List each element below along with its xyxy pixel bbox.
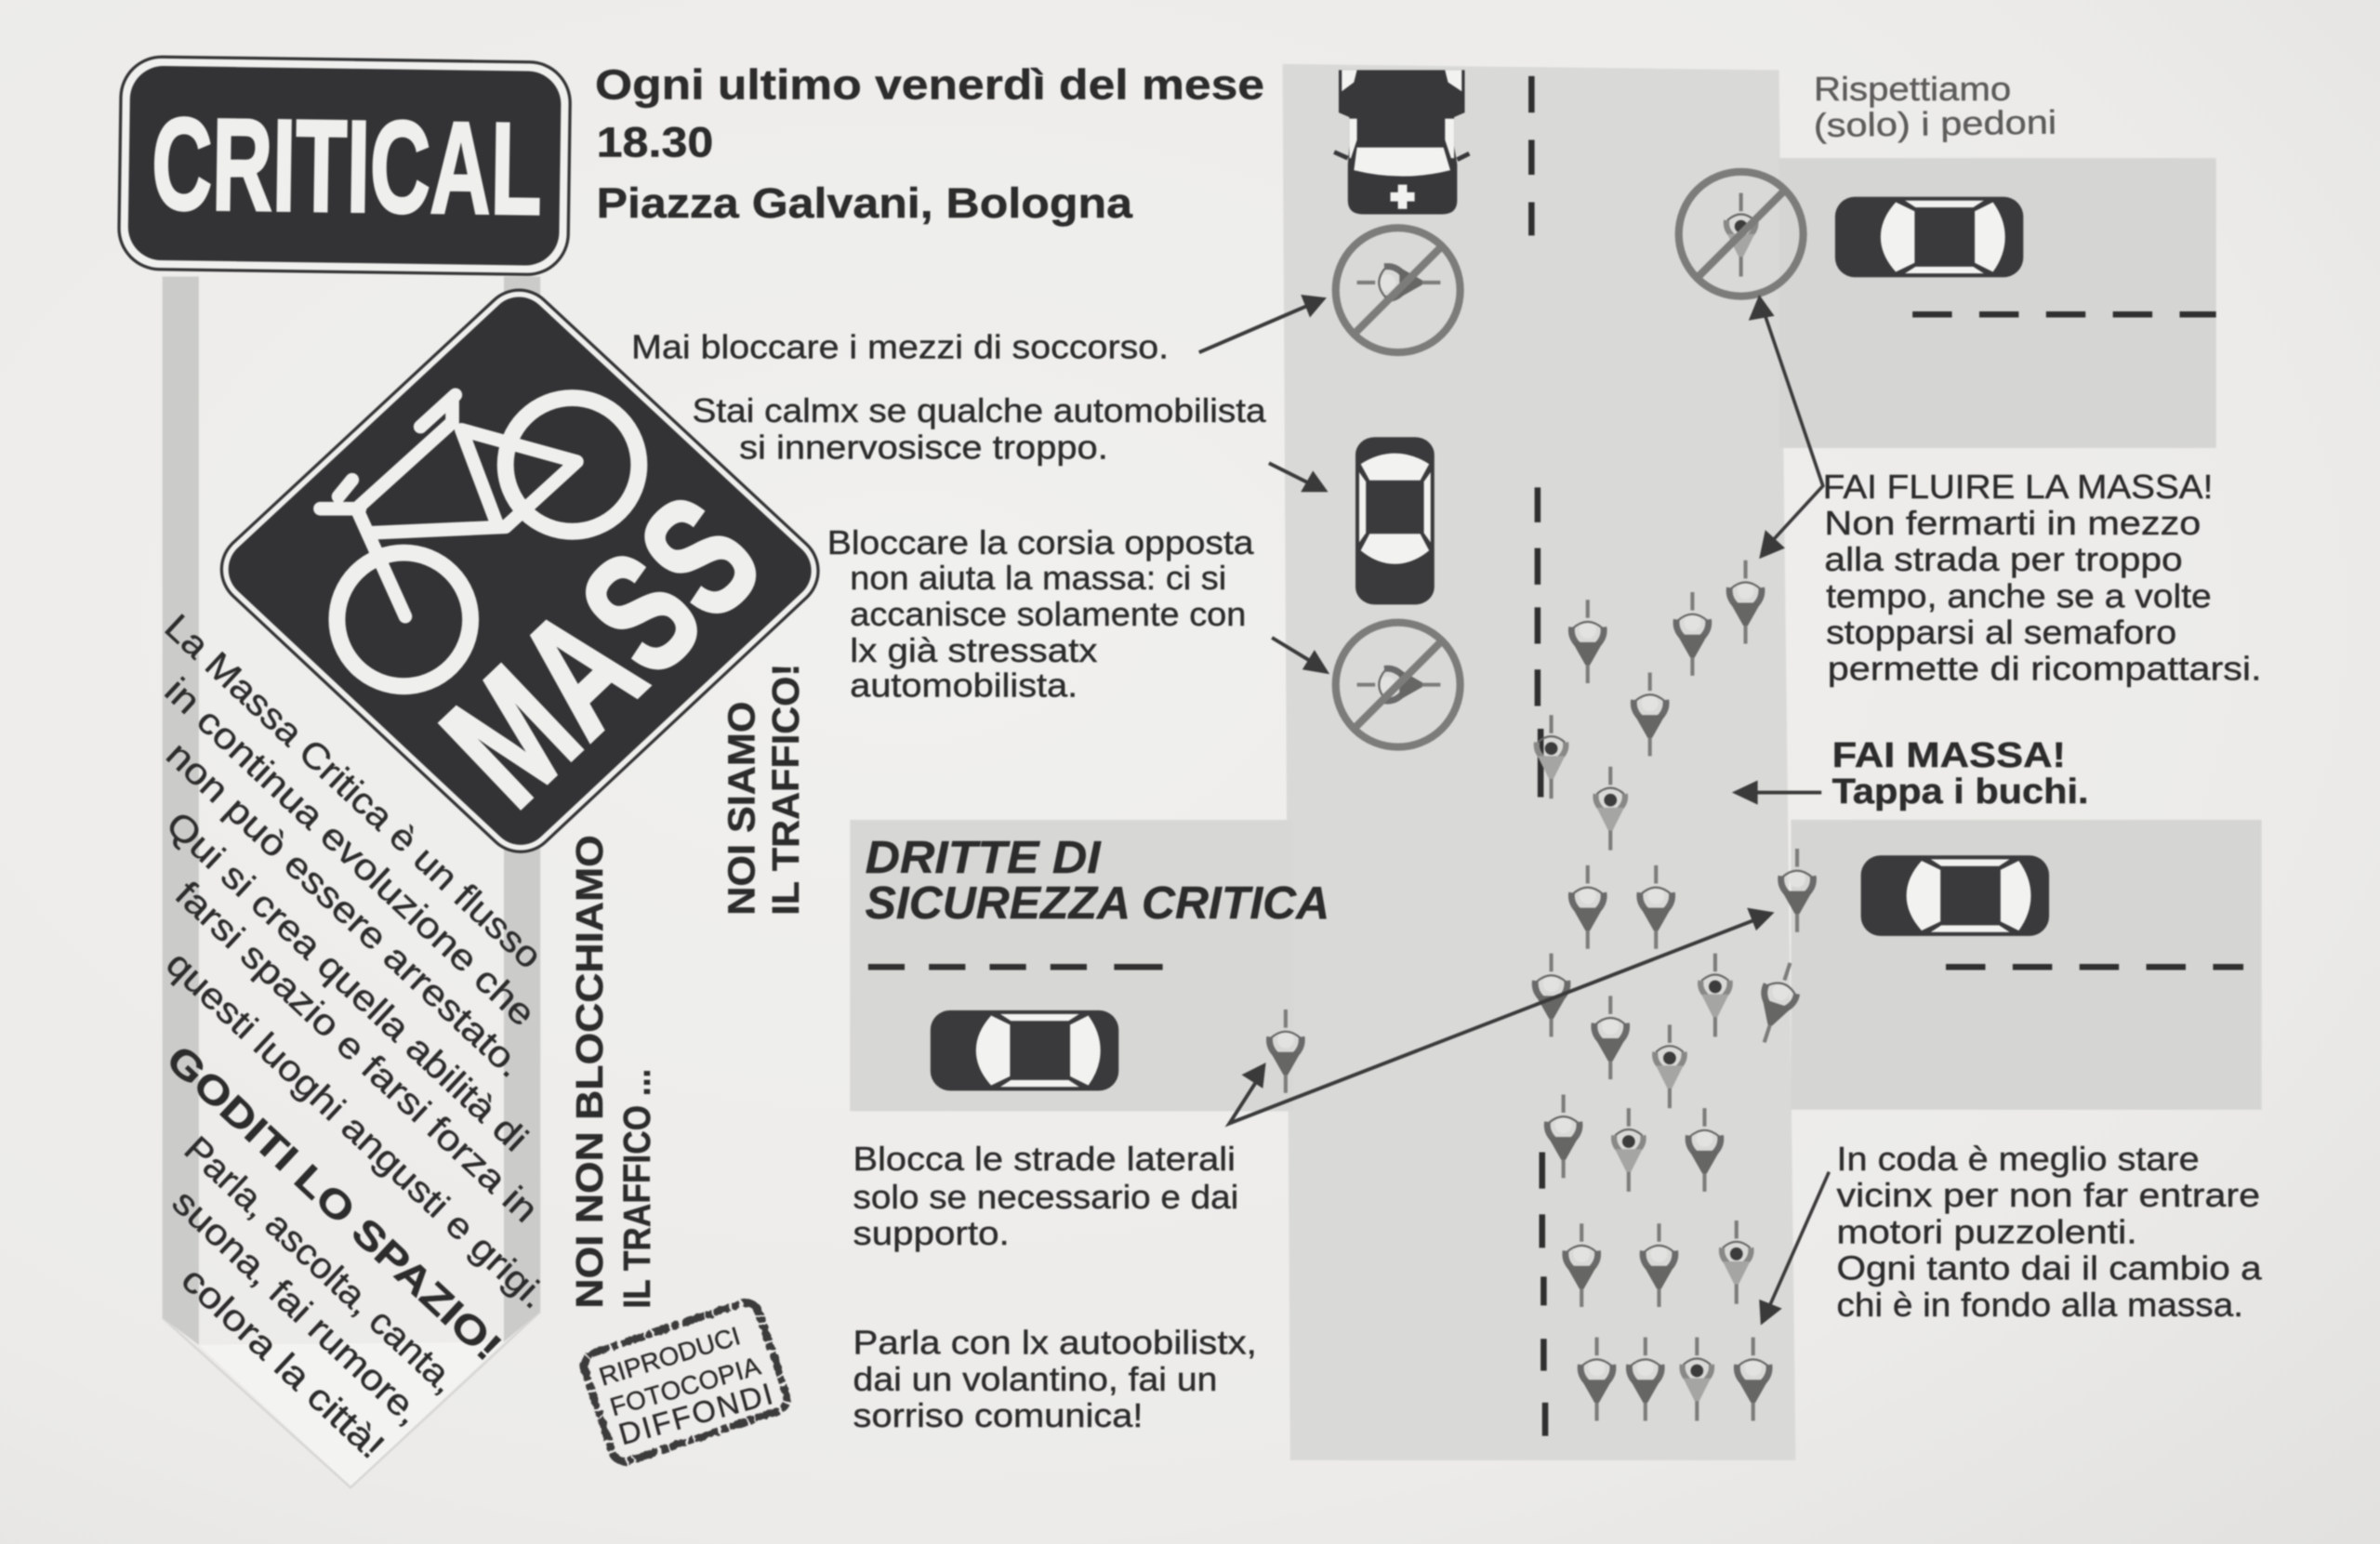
tip: in coda: chi è in fondo alla massa. <box>1837 1286 2243 1324</box>
text block: manifesto (diagonal): GODITI LO SPAZIO! <box>158 1036 510 1369</box>
heading: dritte di sicurezza critica: DRITTE DI <box>866 833 1102 883</box>
tip: strade laterali: supporto. <box>853 1214 1010 1252</box>
heading: dritte di sicurezza critica: SICUREZZA CRITICA <box>866 878 1329 929</box>
text block: manifesto (diagonal): Qui si crea quella abilità di <box>158 804 536 1159</box>
heading: dritte di sicurezza critica <box>866 833 1329 929</box>
vertical slogan: noi siamo il traffico: NOI SIAMO <box>720 702 762 916</box>
vertical slogan: noi siamo il traffico <box>720 664 807 916</box>
sign: MASS diamond with bicycle <box>258 326 795 840</box>
vertical slogan: noi non blocchiamo: IL TRAFFICO ... <box>615 1069 658 1309</box>
tip: parla con lx automobilistx <box>853 1324 1257 1434</box>
banner chevron behind signs <box>163 276 540 1487</box>
text block: manifesto (diagonal): colora la città! <box>174 1260 391 1467</box>
road network <box>850 64 2262 1460</box>
stamp: riproduci fotocopia diffondi: RIPRODUCI <box>596 1321 744 1392</box>
icon: no bike blocking ambulance <box>1336 228 1461 352</box>
tip: strade laterali: Blocca le strade laterali <box>853 1140 1236 1178</box>
tip: stai calmx: si innervosisce troppo. <box>739 428 1108 466</box>
tip: parla con lx automobilistx: dai un volantino, fai un <box>853 1360 1217 1398</box>
arrow: in coda <box>1759 1172 1829 1326</box>
tip: fai fluire la massa: alla strada per troppo <box>1824 540 2183 578</box>
heading: event details: 18.30 <box>597 118 713 165</box>
tip: corsia opposta <box>827 523 1254 705</box>
stamp: riproduci fotocopia diffondi: FOTOCOPIA <box>607 1351 764 1421</box>
tip: fai fluire la massa: Non fermarti in mezzo <box>1824 504 2201 542</box>
tip: in coda <box>1837 1140 2262 1324</box>
tip: rispettiamo i pedoni <box>1814 70 2056 144</box>
tip: in coda: In coda è meglio stare <box>1837 1140 2200 1178</box>
sign: MASS diamond with bicycle: MASS <box>408 459 795 840</box>
cyclists: the mass <box>1269 561 1813 1420</box>
icon: no bike blocking opposite lane <box>1336 623 1461 747</box>
tip: in coda: vicinx per non far entrare <box>1837 1176 2260 1214</box>
sign: CRITICAL: CRITICAL <box>151 90 543 242</box>
stamp: riproduci fotocopia diffondi: DIFFONDI <box>615 1376 776 1451</box>
tip: fai fluire la massa <box>1823 468 2262 688</box>
sign: CRITICAL <box>117 55 572 277</box>
arrow: to parked car <box>1269 463 1329 492</box>
tip: fai fluire la massa: tempo, anche se a volte <box>1826 576 2212 614</box>
text block: manifesto (diagonal) <box>157 607 554 1467</box>
icon: car top right <box>1835 197 2023 277</box>
heading: event details: Piazza Galvani, Bologna <box>597 179 1133 227</box>
tip: mezzi di soccorso: Mai bloccare i mezzi di soccorso. <box>631 328 1169 366</box>
tip: stai calmx <box>692 391 1266 466</box>
tip: rispettiamo i pedoni: Rispettiamo <box>1814 70 2011 108</box>
text block: manifesto (diagonal): farsi spazio e farsi forza in <box>167 874 546 1231</box>
vertical slogan: noi siamo il traffico: IL TRAFFICO! <box>764 664 807 916</box>
tip: rispettiamo i pedoni: (solo) i pedoni <box>1814 103 2056 144</box>
text block: manifesto (diagonal): in continua evoluzione che <box>157 671 543 1035</box>
tip: fai massa: Tappa i buchi. <box>1832 772 2089 811</box>
tip: strade laterali: solo se necessario e dai <box>853 1178 1238 1216</box>
arrow: strade laterali double arrow <box>1229 908 1775 1123</box>
tip: fai massa <box>1832 735 2089 811</box>
tip: fai massa: FAI MASSA! <box>1832 735 2066 774</box>
tip: corsia opposta: automobilista. <box>850 666 1078 705</box>
tip: corsia opposta: non aiuta la massa: ci si <box>850 559 1226 597</box>
tip: parla con lx automobilistx: Parla con lx autoobilistx, <box>853 1324 1257 1362</box>
tip: corsia opposta: lx già stressatx <box>850 631 1097 669</box>
tip: in coda: Ogni tanto dai il cambio a <box>1837 1249 2262 1287</box>
tip: fai fluire la massa: stopparsi al semaforo <box>1826 614 2176 652</box>
stamp: riproduci fotocopia diffondi <box>580 1299 790 1465</box>
tip: fai fluire la massa: permette di ricompattarsi. <box>1828 650 2262 688</box>
tip: stai calmx: Stai calmx se qualche automobilista <box>692 391 1266 429</box>
heading: event details <box>595 60 1264 227</box>
heading: event details: Ogni ultimo venerdì del mese <box>595 60 1264 108</box>
text block: manifesto (diagonal): non può essere arrestato. <box>158 734 531 1086</box>
tip: corsia opposta: Bloccare la corsia opposta <box>827 523 1254 561</box>
tip: fai fluire la massa: FAI FLUIRE LA MASSA! <box>1823 468 2213 506</box>
tip: strade laterali <box>853 1140 1238 1252</box>
icon: bicycle <box>320 395 639 686</box>
icon: car left <box>931 1010 1118 1090</box>
road lane markings <box>868 76 2243 1436</box>
text block: manifesto (diagonal): Parla, ascolta, canta, <box>177 1129 465 1402</box>
text block: manifesto (diagonal): suona, fai rumore, <box>165 1182 430 1432</box>
vertical slogan: noi non blocchiamo: NOI NON BLOCCHIAMO <box>568 835 611 1309</box>
text block: manifesto (diagonal): La Massa Critica è un flusso <box>157 607 549 977</box>
tip: in coda: motori puzzolenti. <box>1837 1212 2137 1250</box>
arrow: fai fluire bracket <box>1749 295 1823 559</box>
vertical slogan: noi non blocchiamo <box>568 835 658 1309</box>
icon: no bike on crossing <box>1679 172 1804 297</box>
arrow: fai massa <box>1732 780 1821 805</box>
icon: parked car vertical <box>1355 437 1435 604</box>
tip: parla con lx automobilistx: sorriso comunica! <box>853 1396 1143 1434</box>
arrow: to opposite lane sign <box>1272 638 1329 674</box>
tip: corsia opposta: accanisce solamente con <box>850 595 1246 633</box>
arrow: to ambulance no-bike sign <box>1199 295 1327 352</box>
icon: ambulance <box>1334 70 1469 215</box>
text block: manifesto (diagonal): questi luoghi angusti e grigi. <box>158 944 554 1317</box>
icon: car right <box>1861 855 2049 936</box>
